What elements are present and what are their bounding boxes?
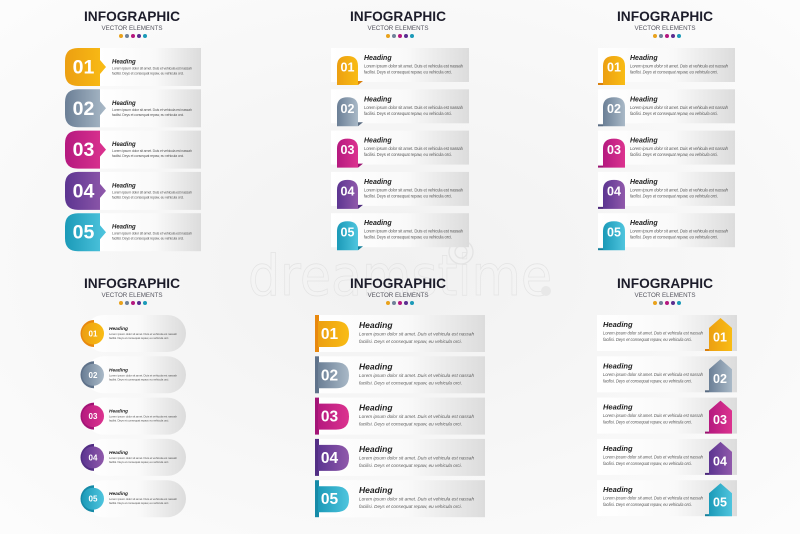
- subtitle: VECTOR ELEMENTS: [368, 292, 429, 299]
- row 03: 03: [89, 412, 98, 421]
- row 04: Heading: [109, 450, 128, 456]
- row 05: Lorem ipsum dolor sit amet. Duis et vehicula est nassah: [112, 232, 192, 236]
- row 03: Lorem ipsum dolor sit amet. Duis et vehicula est nassah: [630, 146, 729, 151]
- colour dots: [119, 301, 147, 305]
- row 02: facilisi. Deys et consequat repaw, eu vehicula orci.: [109, 377, 169, 381]
- row 02: Heading: [603, 361, 633, 370]
- row 03: facilisi. Deys et consequat repaw, eu vehicula orci.: [364, 152, 452, 157]
- row 05: 05: [321, 491, 338, 508]
- panel: top centre infographic: [331, 8, 469, 250]
- row 04: 04: [341, 184, 354, 198]
- row 01: Lorem ipsum dolor sit amet. Duis et vehicula est nassah: [364, 64, 464, 68]
- row 04: Lorem ipsum dolor sit amet. Duis et vehicula est nassah: [364, 187, 464, 192]
- row 04: 04: [73, 180, 94, 202]
- row 01: Lorem ipsum dolor sit amet. Duis et vehicula est nassah: [109, 332, 177, 336]
- row 05: [598, 213, 735, 250]
- panel: top right infographic: [598, 8, 735, 250]
- row 05: 05: [341, 226, 354, 240]
- row 03: facilisi. Deys et consequat repaw, eu vehicula orci.: [359, 422, 462, 427]
- row 01: 01: [321, 326, 338, 343]
- row 02: [80, 356, 186, 393]
- row 04: Heading: [112, 183, 136, 189]
- row 05: facilisi. Deys et consequat repaw, eu vehicula orci.: [364, 235, 452, 240]
- row 01: 01: [341, 60, 354, 74]
- row 01: Heading: [359, 320, 393, 330]
- row 05: 05: [89, 495, 98, 504]
- title: INFOGRAPHIC: [350, 275, 446, 291]
- row 01: [65, 48, 201, 86]
- row 03: [65, 131, 201, 169]
- row 05: Heading: [112, 225, 136, 231]
- panel: bottom left infographic: [80, 275, 186, 517]
- row 03: facilisi. Deys et consequat repaw, eu vehicula orci.: [109, 419, 169, 423]
- title: INFOGRAPHIC: [84, 8, 180, 24]
- row 01: 01: [89, 330, 98, 338]
- watermark: dreamstime: [248, 244, 552, 309]
- row 05: [597, 480, 737, 516]
- row 05: Lorem ipsum dolor sit amet. Duis et vehicula est nassah: [364, 229, 464, 234]
- row 04: facilisi. Deys et consequat repaw, eu vehicula orci.: [603, 461, 692, 466]
- row 01: 01: [713, 330, 727, 344]
- row 02: Lorem ipsum dolor sit amet. Duis et vehicula est nassah: [630, 105, 729, 110]
- row 04: facilisi. Deys et consequat repaw, eu vehicula orci.: [630, 193, 718, 198]
- row 02: Lorem ipsum dolor sit amet. Duis et vehicula est nassah: [112, 108, 192, 112]
- row 01: Heading: [603, 320, 633, 329]
- row 04: Lorem ipsum dolor sit amet. Duis et vehicula est nassah: [109, 456, 177, 460]
- row 05: [315, 480, 485, 517]
- row 02: [315, 356, 485, 393]
- row 02: facilisi. Deys et consequat repaw, eu vehicula orci.: [359, 380, 462, 385]
- row 01: [331, 48, 469, 85]
- row 04: Lorem ipsum dolor sit amet. Duis et vehicula est nassah: [603, 454, 704, 459]
- row 05: Heading: [364, 220, 392, 227]
- row 04: 04: [607, 184, 621, 198]
- row 05: facilisi. Deys et consequat repaw, eu vehicula orci.: [603, 502, 692, 507]
- row 04: [331, 172, 469, 209]
- row 03: 03: [73, 139, 94, 161]
- colour dots: [653, 34, 681, 38]
- panel: top left infographic: [65, 8, 201, 251]
- colour dots: [386, 34, 414, 38]
- row 03: Heading: [630, 138, 658, 145]
- row 04: [597, 439, 737, 475]
- row 02: [597, 356, 737, 392]
- row 03: [331, 131, 469, 168]
- row 02: [331, 89, 469, 126]
- row 03: Heading: [112, 142, 136, 148]
- title: INFOGRAPHIC: [617, 275, 713, 291]
- row 03: Heading: [364, 138, 392, 145]
- row 02: Heading: [109, 367, 128, 373]
- row 05: 05: [607, 226, 621, 240]
- row 02: 02: [607, 102, 621, 116]
- row 02: Lorem ipsum dolor sit amet. Duis et vehicula est nassah: [364, 105, 464, 110]
- row 03: Heading: [603, 403, 633, 412]
- row 04: [598, 172, 735, 209]
- row 03: Heading: [359, 403, 393, 413]
- row 02: Lorem ipsum dolor sit amet. Duis et vehicula est nassah: [603, 372, 704, 377]
- row 03: Lorem ipsum dolor sit amet. Duis et vehicula est nassah: [112, 149, 192, 153]
- row 03: Lorem ipsum dolor sit amet. Duis et vehicula est nassah: [603, 413, 704, 418]
- row 04: facilisi. Deys et consequat repaw, eu vehicula orci.: [109, 460, 169, 464]
- row 02: 02: [713, 372, 727, 386]
- row 02: 02: [321, 367, 338, 384]
- row 03: [315, 398, 485, 435]
- row 02: Heading: [364, 96, 392, 103]
- row 01: Lorem ipsum dolor sit amet. Duis et vehicula est nassah: [359, 332, 474, 336]
- row 03: [597, 398, 737, 434]
- row 04: Lorem ipsum dolor sit amet. Duis et vehicula est nassah: [112, 190, 192, 194]
- row 04: Lorem ipsum dolor sit amet. Duis et vehicula est nassah: [630, 187, 729, 192]
- colour dots: [653, 301, 681, 305]
- row 05: facilisi. Deys et consequat repaw, eu vehicula orci.: [112, 237, 184, 241]
- row 01: Heading: [112, 60, 136, 66]
- subtitle: VECTOR ELEMENTS: [102, 25, 163, 32]
- row 03: facilisi. Deys et consequat repaw, eu vehicula orci.: [630, 152, 718, 157]
- row 03: 03: [607, 143, 621, 157]
- row 04: Lorem ipsum dolor sit amet. Duis et vehicula est nassah: [359, 455, 474, 460]
- row 03: 03: [341, 143, 354, 157]
- row 04: Heading: [603, 444, 633, 453]
- row 02: Heading: [112, 101, 136, 107]
- row 02: facilisi. Deys et consequat repaw, eu vehicula orci.: [112, 113, 184, 117]
- row 04: Heading: [630, 179, 658, 186]
- row 04: [80, 439, 186, 476]
- row 04: facilisi. Deys et consequat repaw, eu vehicula orci.: [112, 195, 184, 199]
- row 04: 04: [89, 453, 98, 462]
- row 01: Lorem ipsum dolor sit amet. Duis et vehicula est nassah: [630, 64, 729, 68]
- row 01: facilisi. Deys et consequat repaw, eu vehicula orci.: [112, 72, 184, 76]
- row 01: Lorem ipsum dolor sit amet. Duis et vehicula est nassah: [112, 66, 192, 70]
- row 02: facilisi. Deys et consequat repaw, eu vehicula orci.: [603, 378, 692, 383]
- subtitle: VECTOR ELEMENTS: [634, 292, 696, 299]
- row 01: [315, 315, 485, 352]
- subtitle: VECTOR ELEMENTS: [634, 25, 696, 32]
- row 03: facilisi. Deys et consequat repaw, eu vehicula orci.: [112, 154, 184, 158]
- row 05: Lorem ipsum dolor sit amet. Duis et vehicula est nassah: [630, 229, 729, 234]
- row 03: Lorem ipsum dolor sit amet. Duis et vehicula est nassah: [109, 415, 177, 419]
- title: INFOGRAPHIC: [617, 8, 713, 24]
- row 01: [598, 48, 735, 85]
- row 05: 05: [713, 496, 727, 510]
- row 01: facilisi. Deys et consequat repaw, eu vehicula orci.: [109, 336, 169, 340]
- row 02: Heading: [630, 96, 658, 103]
- row 02: Heading: [359, 361, 393, 371]
- row 02: Lorem ipsum dolor sit amet. Duis et vehicula est nassah: [359, 373, 474, 378]
- row 01: Heading: [364, 55, 392, 62]
- row 05: Heading: [109, 491, 128, 497]
- row 04: Heading: [364, 179, 392, 186]
- row 02: facilisi. Deys et consequat repaw, eu vehicula orci.: [364, 111, 452, 116]
- panel: bottom right infographic: [597, 275, 737, 516]
- row 04: 04: [321, 450, 338, 467]
- row 03: Lorem ipsum dolor sit amet. Duis et vehicula est nassah: [359, 414, 474, 419]
- row 02: 02: [73, 98, 94, 120]
- row 05: [331, 213, 469, 250]
- row 03: [80, 398, 186, 435]
- title: INFOGRAPHIC: [350, 8, 446, 24]
- row 05: facilisi. Deys et consequat repaw, eu vehicula orci.: [109, 501, 169, 505]
- row 04: [315, 439, 485, 476]
- subtitle: VECTOR ELEMENTS: [368, 25, 429, 32]
- row 04: 04: [713, 454, 727, 468]
- row 01: 01: [607, 60, 621, 74]
- row 04: facilisi. Deys et consequat repaw, eu vehicula orci.: [364, 193, 452, 198]
- row 03: facilisi. Deys et consequat repaw, eu vehicula orci.: [603, 420, 692, 425]
- row 02: [598, 89, 735, 126]
- row 05: [65, 213, 201, 251]
- row 04: Heading: [359, 444, 393, 454]
- row 01: facilisi. Deys et consequat repaw, eu vehicula orci.: [603, 337, 692, 342]
- row 01: facilisi. Deys et consequat repaw, eu vehicula orci.: [630, 70, 718, 74]
- row 05: facilisi. Deys et consequat repaw, eu vehicula orci.: [630, 235, 718, 240]
- colour dots: [386, 301, 414, 305]
- row 03: Lorem ipsum dolor sit amet. Duis et vehicula est nassah: [364, 146, 464, 151]
- row 03: 03: [321, 409, 338, 426]
- row 05: Heading: [603, 485, 633, 494]
- row 03: [598, 131, 735, 168]
- row 04: facilisi. Deys et consequat repaw, eu vehicula orci.: [359, 463, 462, 468]
- row 05: Lorem ipsum dolor sit amet. Duis et vehicula est nassah: [603, 496, 704, 501]
- row 02: Lorem ipsum dolor sit amet. Duis et vehicula est nassah: [109, 373, 177, 377]
- row 01: Lorem ipsum dolor sit amet. Duis et vehicula est nassah: [603, 330, 704, 336]
- row 05: Lorem ipsum dolor sit amet. Duis et vehicula est nassah: [109, 497, 177, 501]
- row 02: 02: [341, 102, 354, 116]
- row 01: 01: [73, 56, 94, 78]
- row 04: [65, 172, 201, 210]
- subtitle: VECTOR ELEMENTS: [102, 292, 163, 299]
- row 02: [65, 89, 201, 127]
- row 05: Lorem ipsum dolor sit amet. Duis et vehicula est nassah: [359, 497, 474, 502]
- title: INFOGRAPHIC: [84, 275, 180, 291]
- row 03: Heading: [109, 409, 128, 415]
- colour dots: [119, 34, 147, 38]
- row 01: Heading: [109, 326, 128, 332]
- row 01: Heading: [630, 55, 658, 62]
- row 01: facilisi. Deys et consequat repaw, eu vehicula orci.: [359, 339, 462, 344]
- row 02: facilisi. Deys et consequat repaw, eu vehicula orci.: [630, 111, 718, 116]
- row 03: 03: [713, 413, 727, 427]
- panel: bottom centre infographic: [315, 275, 485, 517]
- row 05: 05: [73, 222, 94, 244]
- row 05: Heading: [630, 220, 658, 227]
- row 01: facilisi. Deys et consequat repaw, eu vehicula orci.: [364, 70, 452, 74]
- row 01: [80, 315, 186, 352]
- row 01: [597, 315, 737, 351]
- row 02: 02: [89, 371, 98, 380]
- row 05: [80, 480, 186, 517]
- row 05: facilisi. Deys et consequat repaw, eu vehicula orci.: [359, 504, 462, 509]
- row 05: Heading: [359, 485, 393, 495]
